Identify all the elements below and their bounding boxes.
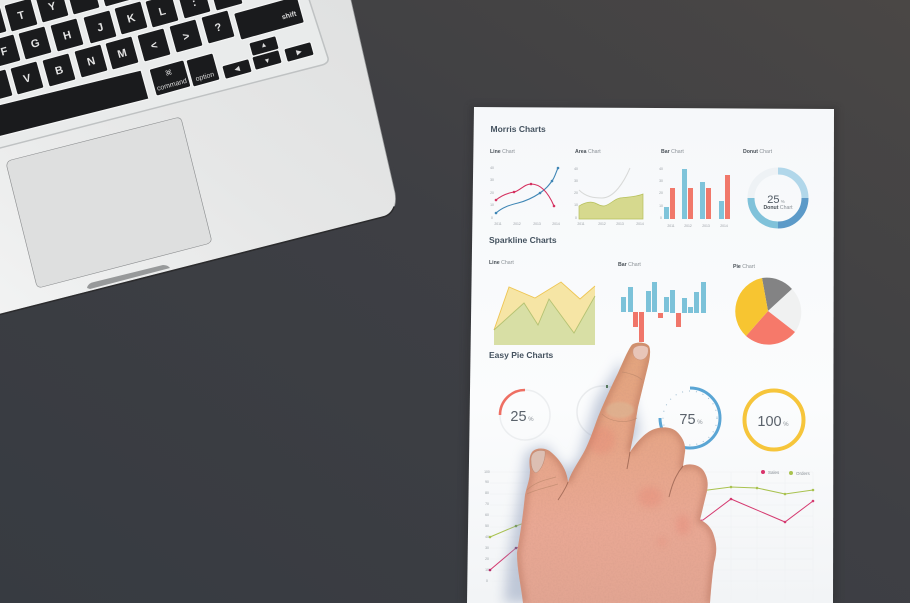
key row: bottom letters: V (22, 72, 33, 86)
area chart: 10 (574, 203, 578, 207)
sparkline line chart (489, 260, 595, 345)
easy pie 25% (500, 390, 550, 440)
paper sheet with charts (462, 105, 838, 603)
line chart: 0 (491, 216, 493, 220)
legend: Orders (796, 471, 811, 476)
y axis labels: 50 (485, 524, 489, 528)
area chart: 2012 (598, 222, 606, 226)
knuckle callus (606, 402, 634, 418)
key row: home row (0, 0, 243, 68)
key row: home row: J (96, 21, 105, 35)
bar chart: 2013 (702, 224, 710, 228)
line chart: 30 (490, 178, 494, 182)
area chart: 0 (575, 216, 577, 220)
key row: bottom letters: ? (213, 21, 223, 35)
key row: upper letters (0, 0, 132, 39)
thumbnail (531, 450, 545, 473)
donut chart: Donut Chart (743, 149, 773, 155)
key row: bottom letters (0, 10, 235, 103)
area chart: 2014 (636, 222, 644, 226)
bar chart: 10 (659, 204, 663, 208)
command key: ⌘ (164, 68, 173, 78)
donut chart (743, 149, 805, 225)
sales line (489, 498, 814, 571)
command key (149, 60, 191, 96)
bar chart: 30 (659, 179, 663, 183)
line chart: 2013 (533, 222, 541, 226)
y axis labels: 40 (485, 535, 489, 539)
key row: bottom letters: < (150, 39, 159, 53)
sparkline bar chart: Bar Chart (618, 262, 641, 268)
area chart: 2013 (616, 222, 624, 226)
section title: Morris Charts: Morris Charts (490, 124, 546, 134)
y axis labels: 10 (485, 568, 489, 572)
donut chart: Donut Chart (763, 205, 793, 211)
paper shadow (462, 105, 838, 603)
y axis labels: 90 (485, 480, 489, 484)
command key: command (156, 78, 188, 93)
paper (467, 107, 834, 603)
knuckle wrinkles (527, 372, 642, 494)
sales and orders line chart (484, 470, 814, 600)
sparkline line chart: Line Chart (489, 260, 514, 266)
line chart: 2012 (513, 222, 521, 226)
laptop body (0, 0, 396, 315)
y axis labels: 20 (485, 557, 489, 561)
easy pie 25%: 25 % (510, 409, 534, 425)
y axis labels: 70 (485, 502, 489, 506)
key row: upper letters: Y (47, 0, 58, 14)
keyboard keys (0, 0, 314, 137)
line chart (490, 149, 560, 226)
arrow keys: ▶ (296, 48, 303, 57)
y axis labels: 30 (485, 546, 489, 550)
bar chart: 40 (659, 167, 663, 171)
line chart: 2014 (552, 222, 560, 226)
easy pie 75% (660, 388, 720, 448)
key row: upper letters: T (16, 9, 26, 23)
easy pie 50% (577, 385, 629, 438)
shift key (233, 0, 305, 40)
sparkline bar chart (618, 262, 706, 342)
arrow keys: ▲ (260, 41, 268, 50)
y axis labels (484, 470, 490, 583)
bar chart: 0 (660, 216, 662, 220)
key row: bottom letters: > (182, 30, 191, 44)
key row: home row: H (62, 29, 73, 43)
legend: Sales (768, 470, 780, 475)
hand silhouette (517, 343, 716, 603)
donut chart: 25 % (767, 194, 785, 206)
key row: home row: L (157, 5, 167, 19)
y axis labels: 60 (485, 513, 489, 517)
bar chart (659, 149, 730, 228)
area chart: 2011 (577, 222, 585, 226)
hand pointing at the chart (504, 340, 725, 603)
keyboard well (0, 0, 328, 149)
key row: bottom letters: M (116, 47, 128, 61)
sparkline pie chart (733, 264, 801, 345)
section title: Sparkline Charts: Sparkline Charts (489, 235, 557, 245)
bar chart: 2011 (667, 224, 675, 228)
bar chart: Bar Chart (661, 149, 684, 155)
index fingernail (633, 346, 648, 360)
section title: Easy Pie Charts: Easy Pie Charts (489, 350, 554, 360)
hand shadow on paper (504, 360, 640, 603)
chart grid (490, 472, 813, 600)
y axis labels: 80 (485, 491, 489, 495)
line chart: 10 (490, 203, 494, 207)
line chart: 20 (490, 191, 494, 195)
orders line (489, 486, 814, 538)
bar chart: 2014 (720, 224, 728, 228)
bar chart: 20 (659, 191, 663, 195)
area chart: 30 (574, 179, 578, 183)
key row: home row: K (126, 12, 137, 26)
line chart: 2011 (494, 222, 502, 226)
line chart: 40 (490, 166, 494, 170)
laptop dark lower edge (0, 207, 394, 315)
space bar (0, 70, 149, 137)
bar chart: 2012 (684, 224, 692, 228)
y axis labels: 0 (486, 579, 488, 583)
finger creases (558, 452, 683, 500)
easy pie 100%: 100 % (757, 414, 789, 430)
key row: home row: G (30, 37, 41, 51)
arrow keys: ◀ (234, 65, 241, 74)
arrow keys: ▼ (263, 57, 272, 66)
trackpad notch (87, 265, 170, 289)
shift key: shift (281, 11, 298, 21)
easy pie 100% (744, 390, 804, 450)
hand shading and texture (510, 340, 725, 603)
line chart: Line Chart (490, 149, 515, 155)
area chart: Area Chart (575, 149, 601, 155)
area chart: 40 (574, 167, 578, 171)
key row: bottom letters: B (54, 64, 65, 78)
option key: option (195, 71, 215, 83)
easy pie 75%: 75 % (679, 412, 703, 428)
legend (761, 470, 811, 476)
area chart (574, 149, 644, 226)
laptop (0, 0, 396, 315)
option key (186, 53, 220, 87)
sparkline pie chart: Pie Chart (733, 264, 755, 270)
y axis labels: 100 (484, 470, 490, 474)
key row: bottom letters: N (86, 55, 97, 69)
area chart: 20 (574, 191, 578, 195)
arrow keys (222, 36, 314, 79)
trackpad (7, 118, 211, 287)
